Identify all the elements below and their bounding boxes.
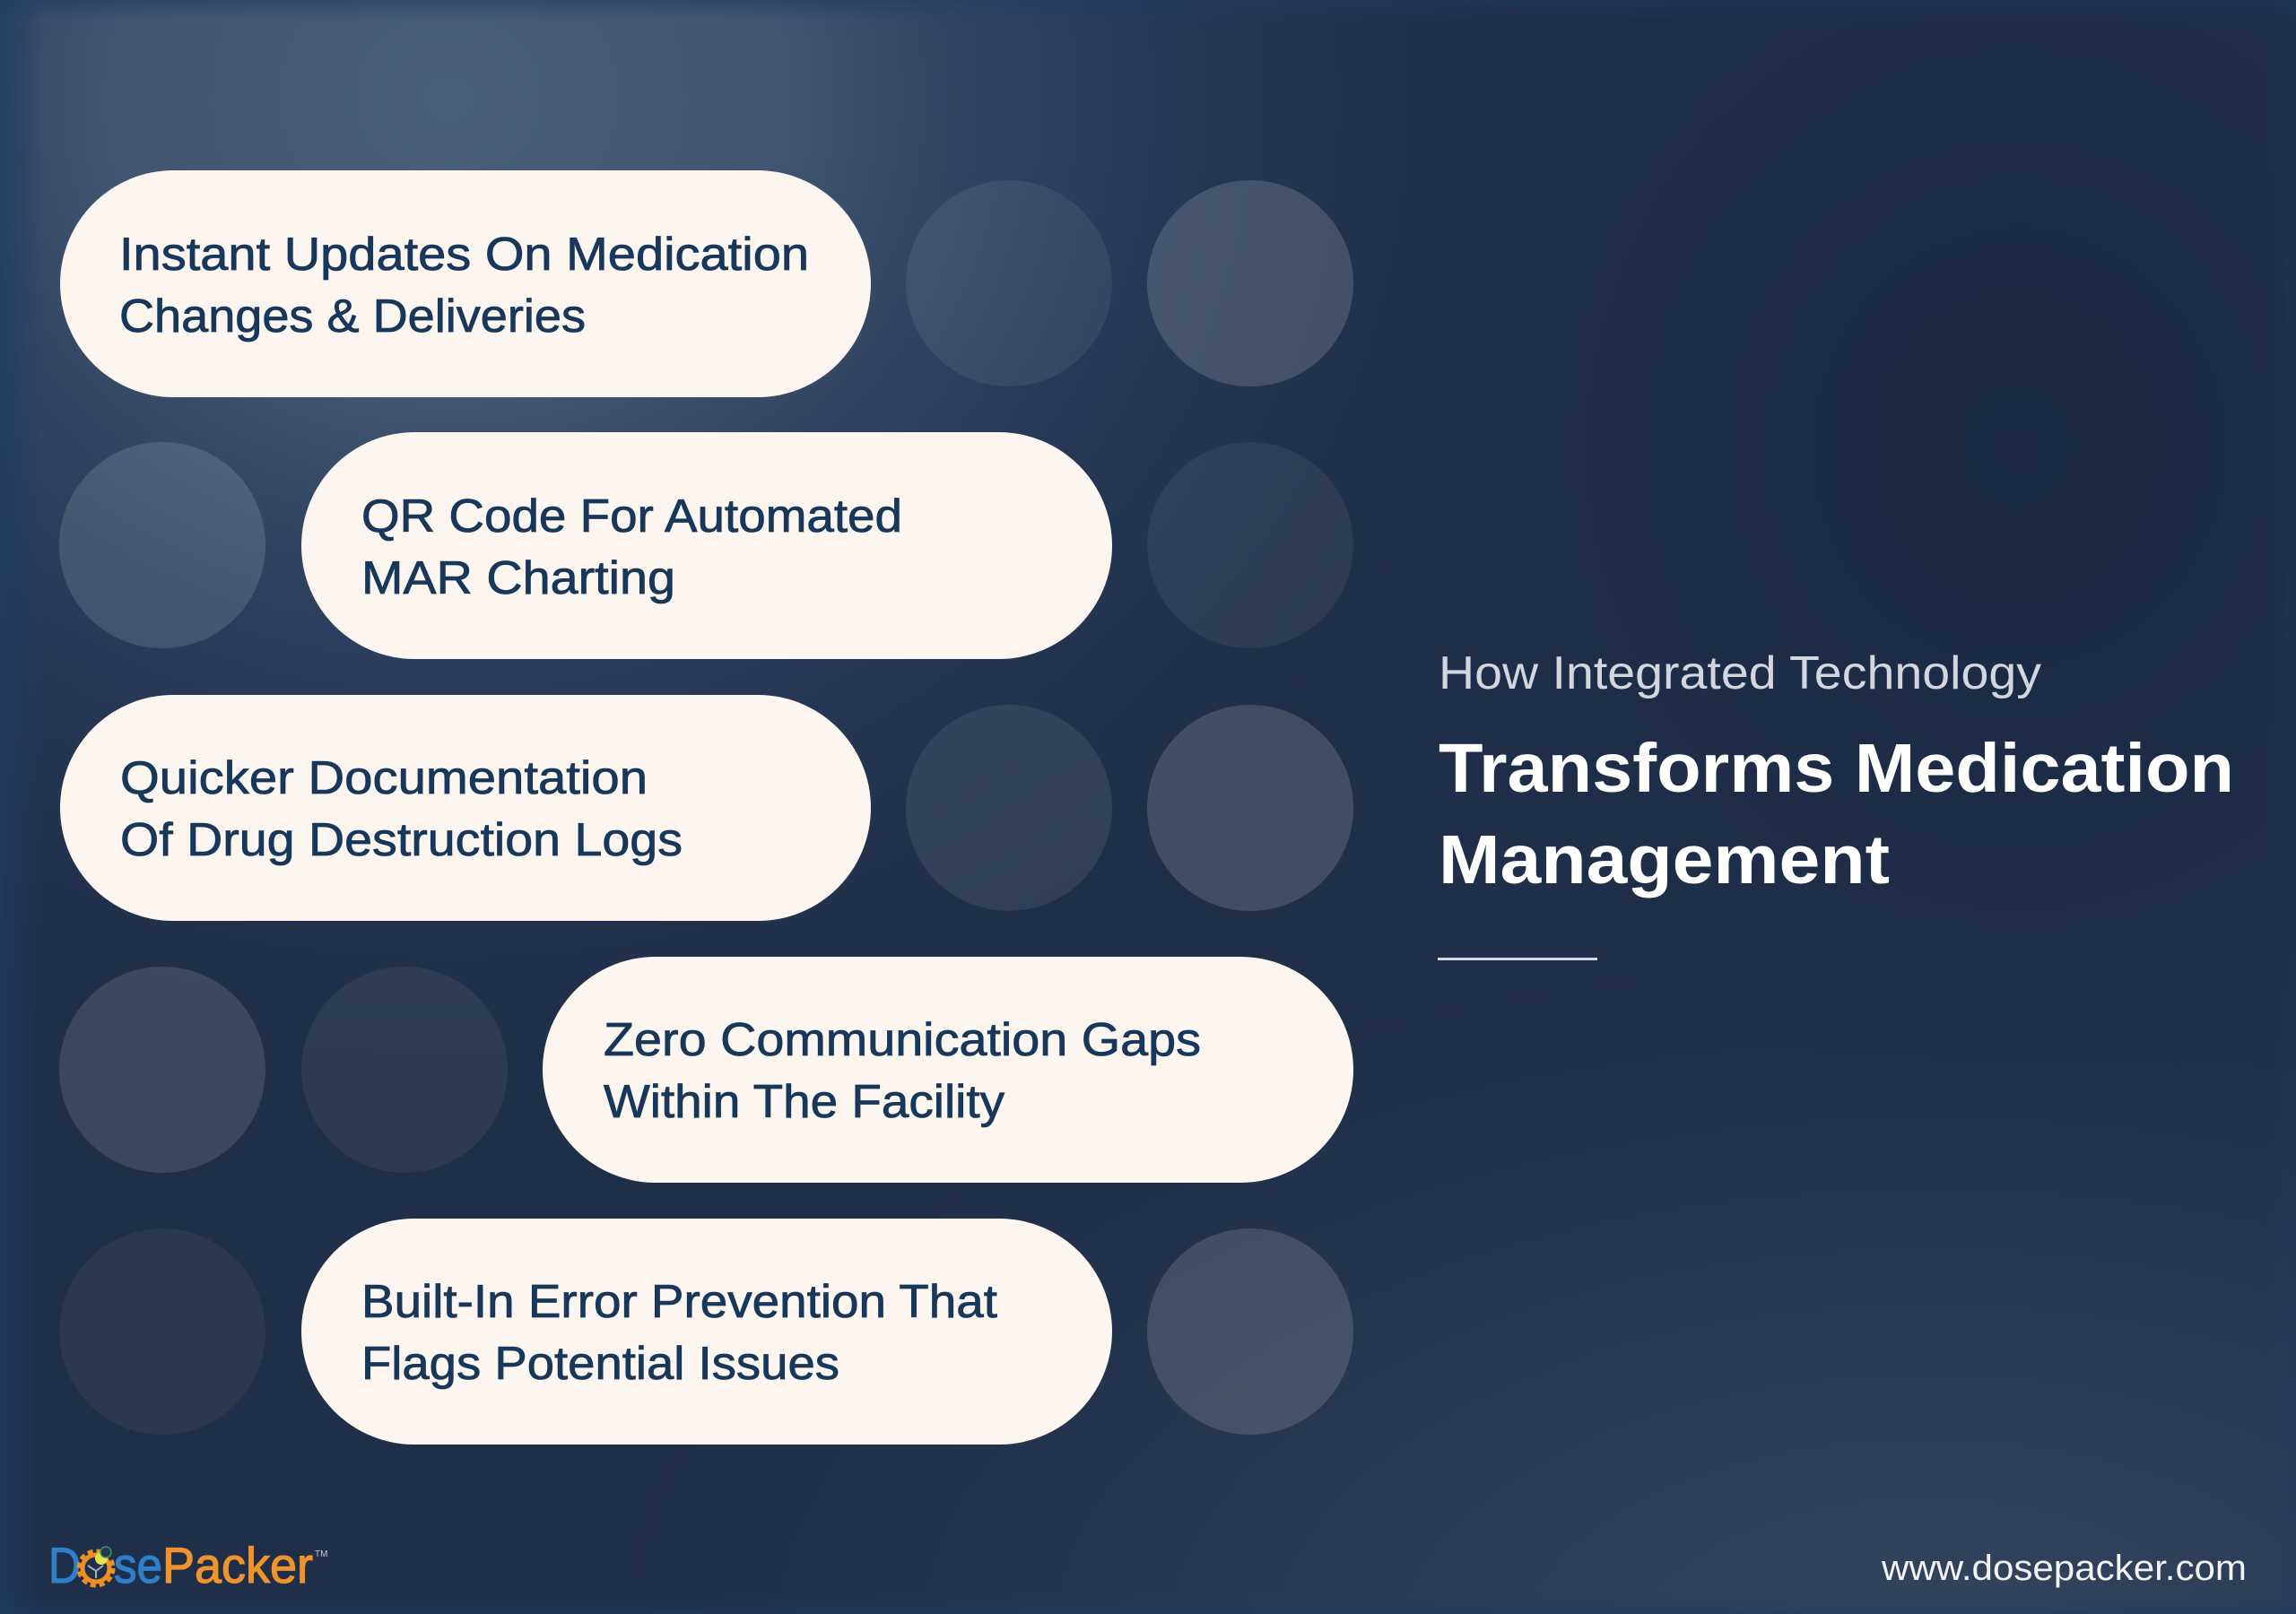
heading: title: Management bbox=[1439, 821, 1890, 898]
pill: quicker documentation: Quicker Documentation bbox=[120, 752, 648, 804]
decorative circle row 1 column 4 bbox=[1147, 180, 1353, 386]
pill: built-in error prevention: Flags Potential Issues bbox=[361, 1338, 839, 1390]
logo: DosePacker: D bbox=[48, 1537, 81, 1593]
icon: gear with capsule bbox=[79, 1547, 113, 1585]
heading: title: Transforms Medication bbox=[1439, 730, 2234, 807]
pill: quicker documentation bbox=[60, 695, 871, 921]
decorative circle row 5 column 4 bbox=[1147, 1228, 1353, 1435]
decorative circle row 1 column 3 bbox=[906, 180, 1112, 386]
website URL: www.dosepacker.com bbox=[1881, 1549, 2247, 1588]
logo: DosePacker: se bbox=[114, 1537, 162, 1593]
pill: zero communication gaps: Within The Facility bbox=[604, 1076, 1004, 1128]
decorative circle row 2 column 4 bbox=[1147, 442, 1353, 648]
decorative circle row 5 column 1 bbox=[59, 1228, 265, 1435]
decorative circle row 3 column 4 bbox=[1147, 705, 1353, 911]
pill: built-in error prevention bbox=[301, 1219, 1112, 1445]
logo: DosePacker bbox=[48, 1537, 327, 1593]
pill: QR code: MAR Charting bbox=[361, 552, 675, 604]
heading underline bbox=[1438, 958, 1597, 960]
pill: QR code: QR Code For Automated bbox=[361, 490, 902, 542]
pill: QR code bbox=[301, 432, 1112, 659]
logo: DosePacker: TM bbox=[315, 1549, 327, 1559]
pill: quicker documentation: Of Drug Destruction Logs bbox=[120, 814, 683, 866]
pill: zero communication gaps bbox=[543, 957, 1353, 1183]
decorative circle row 4 column 2 bbox=[301, 967, 508, 1173]
pill: zero communication gaps: Zero Communication Gaps bbox=[604, 1014, 1201, 1066]
decorative circle row 3 column 3 bbox=[906, 705, 1112, 911]
pill: instant updates: Instant Updates On Medication bbox=[119, 229, 809, 281]
decorative circle row 2 column 1 bbox=[59, 442, 265, 648]
heading: subtitle: How Integrated Technology bbox=[1439, 647, 2041, 699]
pill: built-in error prevention: Built-In Error Prevention That bbox=[361, 1276, 998, 1328]
decorative circle row 4 column 1 bbox=[59, 967, 265, 1173]
heading: title bbox=[1439, 730, 2234, 898]
logo: DosePacker: Packer bbox=[162, 1537, 313, 1593]
pill: instant updates bbox=[60, 170, 871, 397]
pill: instant updates: Changes & Deliveries bbox=[119, 291, 586, 343]
